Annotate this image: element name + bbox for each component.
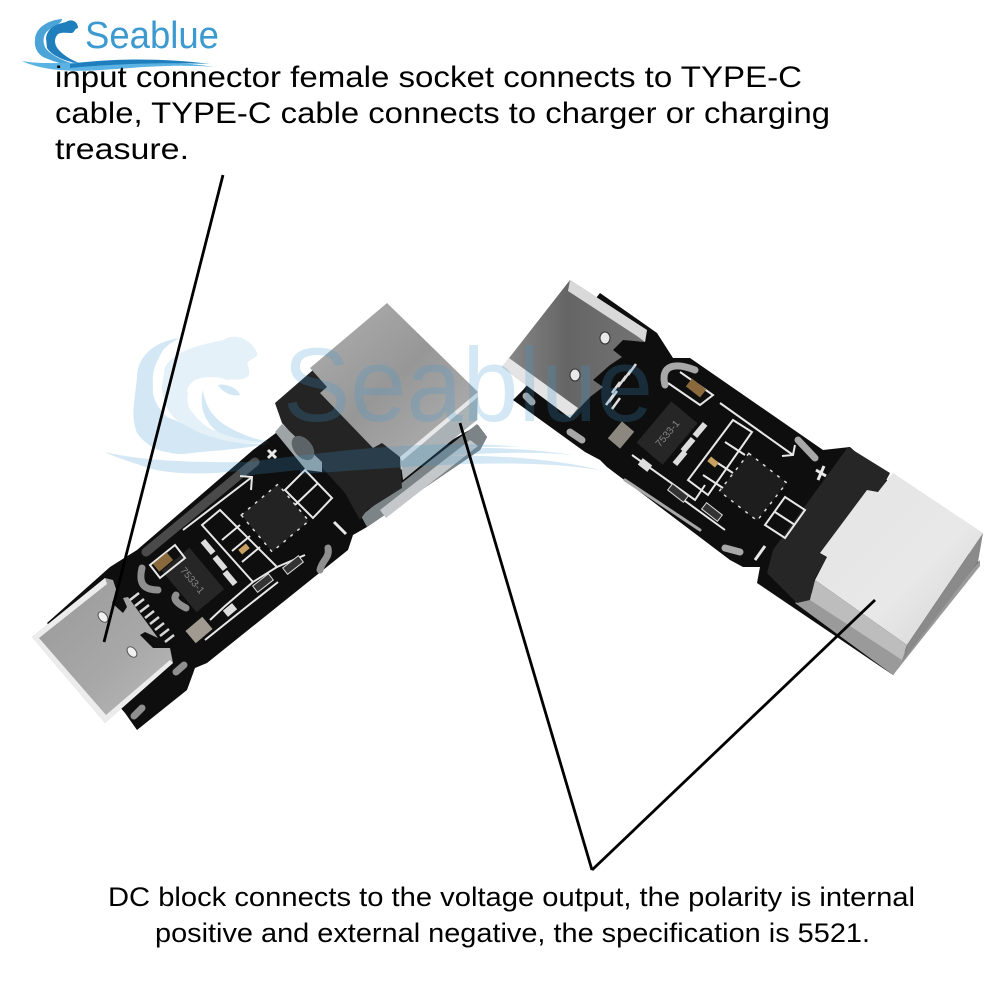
arrow: input connector leader line — [104, 175, 223, 642]
right USB-C connector — [502, 280, 647, 418]
top callout text: cable, TYPE-C cable connects to charger or charging — [55, 97, 830, 130]
left connector rim — [32, 578, 173, 723]
logo wave icon — [35, 19, 82, 66]
right metal DC socket top — [815, 473, 983, 645]
top callout text: input connector female socket connects to TYPE-C — [55, 61, 802, 94]
left connector pins — [130, 593, 174, 642]
bottom callout text: DC block connects to the voltage output, the polarity is internal — [108, 882, 915, 912]
right QFN chip — [719, 453, 787, 521]
left regulator chip — [162, 548, 224, 612]
watermark swoosh — [105, 444, 600, 476]
watermark word: Seablue — [283, 327, 653, 444]
right connector rims — [502, 358, 578, 418]
left connector holes — [96, 610, 139, 659]
top callout text: treasure. — [55, 133, 189, 166]
bottom callout text: positive and external negative, the specification is 5521. — [155, 918, 870, 948]
bottom callout text — [108, 882, 915, 948]
right metal DC socket side — [810, 580, 907, 660]
watermark wave icon — [133, 337, 270, 454]
left silkscreen traces — [150, 450, 346, 640]
left QFN chip — [241, 484, 309, 552]
left trace reflection — [146, 462, 255, 552]
left regulator chip: 7533-1 — [178, 566, 206, 597]
left SMD parts — [153, 539, 303, 643]
left PCB — [47, 425, 487, 730]
right DC socket front — [902, 533, 983, 662]
right SMD parts — [608, 379, 722, 521]
right regulator chip: 7533-1 — [654, 418, 683, 449]
arrow: DC block leader lines — [460, 423, 875, 870]
left PCB edge under socket — [361, 424, 487, 527]
left USB-C connector — [32, 578, 173, 723]
left metal DC socket top — [310, 303, 478, 457]
right silkscreen traces — [632, 372, 826, 560]
logo wordmark: Seablue — [85, 15, 219, 57]
left module: USB-C to DC board — [32, 303, 487, 730]
left solder pads — [134, 548, 328, 716]
right connector pins — [606, 364, 636, 409]
right PCB — [513, 293, 980, 675]
right solder pads — [526, 366, 815, 552]
left black connector housing — [275, 370, 402, 520]
logo swoosh — [22, 60, 215, 71]
left silver tab — [275, 424, 322, 472]
right board edge under socket — [795, 560, 980, 675]
top callout text — [55, 61, 830, 166]
right regulator chip — [637, 401, 697, 465]
right module: USB-C to DC board — [502, 280, 983, 675]
right black connector housing — [767, 447, 890, 603]
right connector holes — [570, 332, 610, 381]
Seablue logo — [22, 15, 219, 71]
watermark: Seablue logo — [105, 327, 653, 476]
left metal DC socket front — [400, 392, 478, 480]
